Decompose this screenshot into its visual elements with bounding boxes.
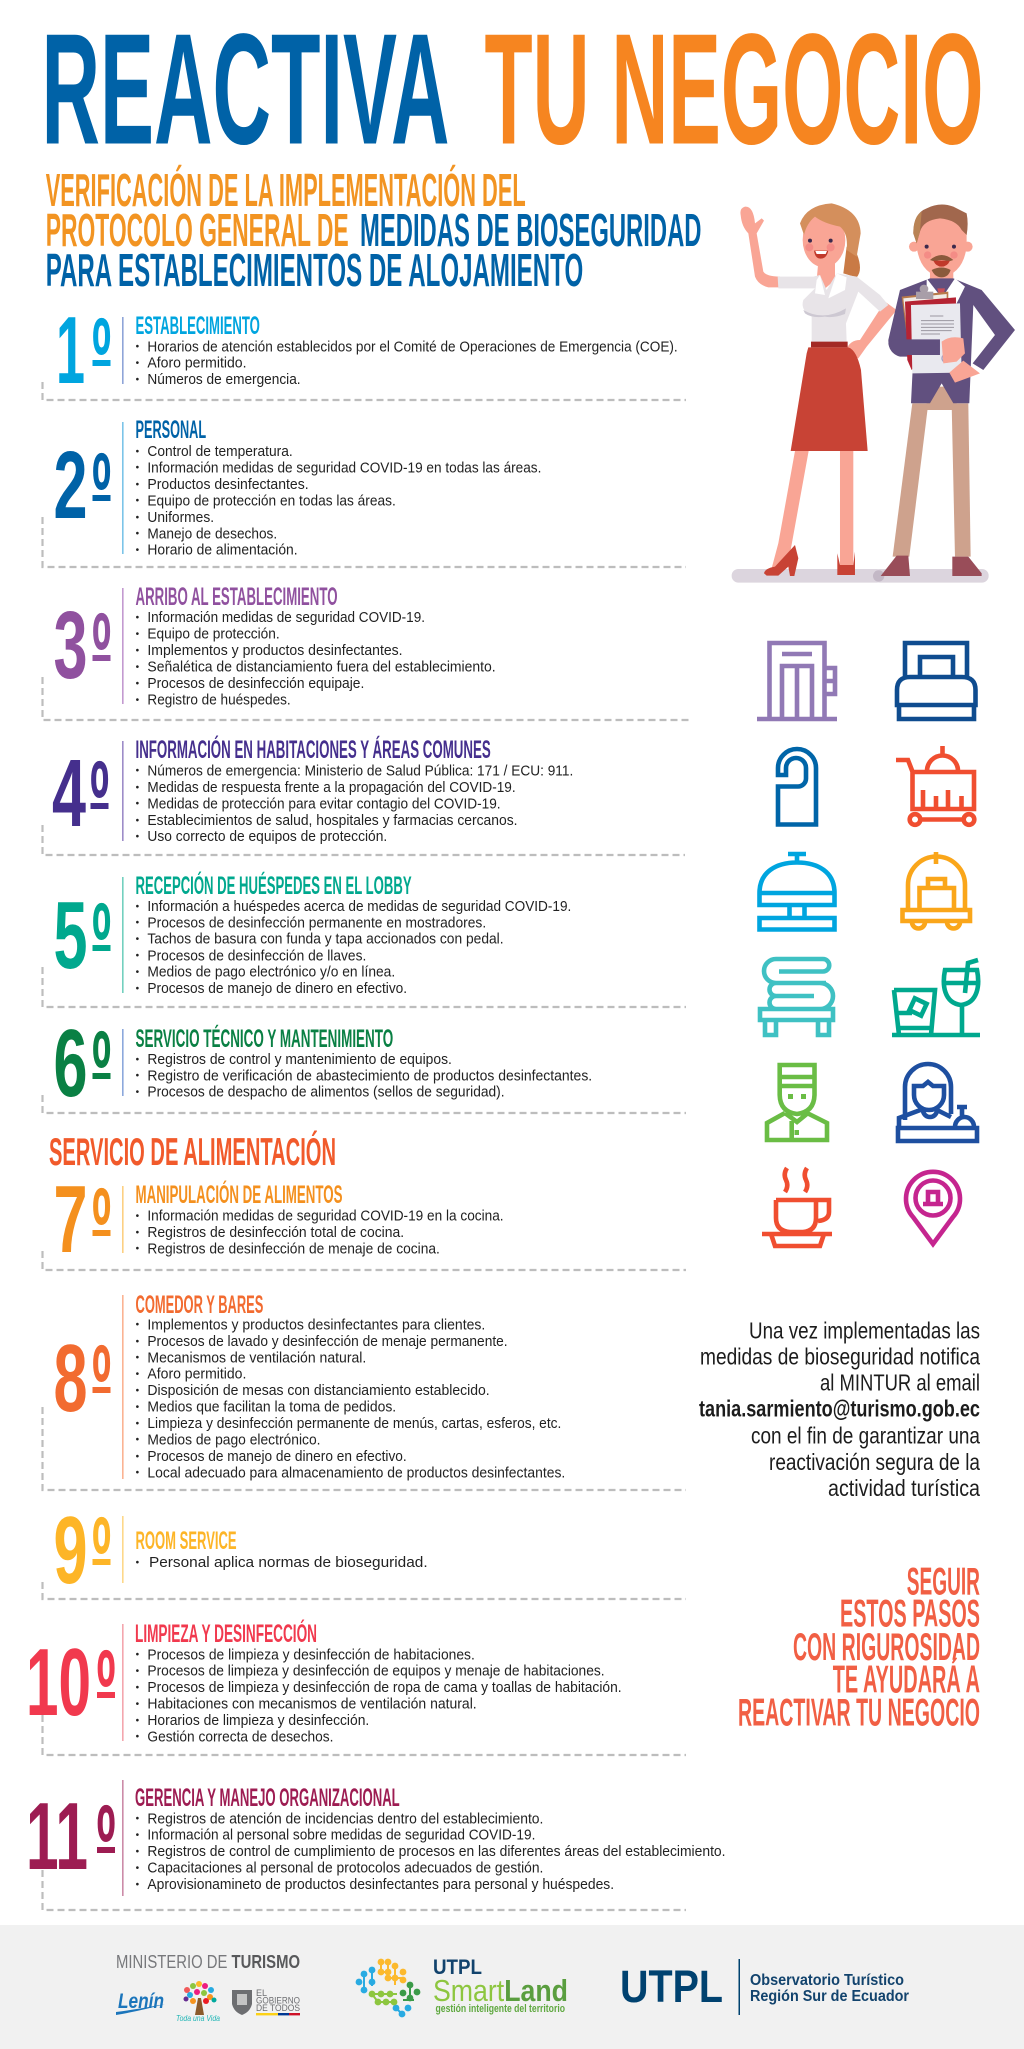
icon: drinks <box>892 960 980 1035</box>
logo: toda una vida tree <box>176 1981 220 2023</box>
step 10: º <box>96 1627 116 1750</box>
list: Medios de pago electrónico y/o en línea. <box>147 964 395 981</box>
illustration: woman and man with clipboard <box>732 203 1015 583</box>
list <box>136 1208 504 1257</box>
list: • <box>136 645 140 656</box>
number 9º: 9 <box>54 1497 88 1604</box>
subtitle <box>46 164 701 296</box>
number 7º: 7 <box>54 1166 88 1273</box>
logo: toda una vida tree: Toda una Vida <box>176 2014 220 2023</box>
list: Aprovisionamineto de productos desinfectantes para personal y huéspedes. <box>147 1876 614 1893</box>
callout: notification: al MINTUR al email <box>820 1370 980 1396</box>
list: Registros de desinfección total de cocina. <box>147 1224 404 1241</box>
list: Medios de pago electrónico. <box>147 1431 320 1448</box>
list <box>136 1810 726 1893</box>
list: • <box>136 799 140 810</box>
list: Procesos de despacho de alimentos (sellos de seguridad). <box>147 1084 505 1101</box>
logo: el gobierno de todos <box>232 1988 300 2015</box>
list: Habitaciones con mecanismos de ventilación natural. <box>147 1696 477 1713</box>
list: • <box>136 1071 140 1082</box>
callout: follow these steps <box>738 1560 980 1735</box>
list: • <box>136 512 140 523</box>
icon: coffee cup <box>762 1168 832 1246</box>
list: Establecimientos de salud, hospitales y farmacias cercanos. <box>147 812 518 829</box>
number 4º: 4 <box>52 740 86 847</box>
list: Equipo de protección. <box>147 626 280 642</box>
list: • <box>136 1557 140 1568</box>
list: • <box>136 901 140 912</box>
list: • <box>136 766 140 777</box>
list: Procesos de desinfección de llaves. <box>147 947 366 964</box>
list: Procesos de limpieza y desinfección de ropa de cama y toallas de habitación. <box>147 1679 622 1696</box>
footer <box>0 1925 1024 2049</box>
step 1: º <box>92 295 111 418</box>
list: • <box>136 1336 140 1347</box>
list: • <box>136 1468 140 1479</box>
list: Control de temperatura. <box>147 443 293 460</box>
logo: utpl smartland <box>356 1956 568 2017</box>
list: • <box>136 545 140 556</box>
list: Señalética de distanciamiento fuera del establecimiento. <box>147 658 496 676</box>
callout: notification: reactivación segura de la <box>769 1449 980 1475</box>
logo: el gobierno de todos: DE TODOS <box>256 2003 300 2013</box>
title: REACTIVA <box>42 2 450 178</box>
heading: manipulación de alimentos: MANIPULACIÓN DE ALIMENTOS <box>136 1179 342 1209</box>
logo: utpl smartland: UTPL <box>433 1956 482 1979</box>
icon: door hanger <box>778 749 816 824</box>
logo: utpl observatorio turístico: UTPL <box>620 1961 723 2012</box>
list: Implementos y productos desinfectantes. <box>147 642 403 659</box>
step 2: º <box>92 430 111 553</box>
logo: lenin: Lenín <box>118 1990 164 2013</box>
step 1 <box>42 295 686 418</box>
list: • <box>136 1054 140 1065</box>
list: Aforo permitido. <box>147 1366 246 1383</box>
list: • <box>136 967 140 978</box>
list: • <box>136 815 140 826</box>
list: • <box>136 1732 140 1743</box>
list: • <box>136 1320 140 1331</box>
list <box>136 1646 622 1745</box>
step 2 <box>42 416 686 567</box>
list: • <box>136 1227 140 1238</box>
number 2º: 2 <box>54 432 88 539</box>
list: • <box>136 496 140 507</box>
list: • <box>136 1830 140 1841</box>
number 5º: 5 <box>54 882 88 989</box>
number 1º: 1 <box>56 297 85 404</box>
step 11: º <box>96 1782 116 1905</box>
list: Medidas de protección para evitar contagio del COVID-19. <box>147 795 501 812</box>
list: • <box>136 1353 140 1364</box>
step 3 <box>42 583 692 720</box>
list: Procesos de lavado y desinfección de menaje permanente. <box>147 1333 508 1350</box>
number 6º: 6 <box>54 1010 88 1117</box>
list: Implementos y productos desinfectantes para clientes. <box>147 1316 485 1333</box>
list: • <box>136 1402 140 1413</box>
list: Productos desinfectantes. <box>147 476 309 493</box>
list: Registros de control de cumplimiento de procesos en las diferentes áreas del establecimiento. <box>147 1843 725 1860</box>
list <box>136 1051 592 1101</box>
list: • <box>136 1666 140 1677</box>
icon: bed <box>897 643 976 719</box>
icon: food cart <box>896 746 974 825</box>
icon: reception bell <box>760 854 834 930</box>
step 8 <box>42 1291 686 1490</box>
step 7 <box>42 1165 686 1288</box>
step 9: º <box>92 1494 111 1617</box>
list: Uniformes. <box>147 509 214 526</box>
list: Información al personal sobre medidas de seguridad COVID-19. <box>147 1827 535 1844</box>
step 7: º <box>92 1165 111 1288</box>
list: • <box>136 695 140 706</box>
list: • <box>136 463 140 474</box>
list <box>136 898 571 997</box>
step 5 <box>42 870 686 1007</box>
list: Procesos de limpieza y desinfección de equipos y menaje de habitaciones. <box>147 1663 605 1680</box>
list: • <box>136 612 140 623</box>
list: Local adecuado para almacenamiento de productos desinfectantes. <box>147 1464 565 1481</box>
list: Registros de atención de incidencias dentro del establecimiento. <box>147 1810 543 1827</box>
list: • <box>136 1699 140 1710</box>
list: Equipo de protección en todas las áreas. <box>147 492 396 509</box>
list: Procesos de limpieza y desinfección de habitaciones. <box>147 1646 475 1663</box>
list <box>136 1316 565 1481</box>
icon: bellboy <box>767 1065 827 1140</box>
list: Horarios de limpieza y desinfección. <box>147 1712 369 1729</box>
list: Información medidas de seguridad COVID-19 en la cocina. <box>147 1208 504 1225</box>
callout: notification: Una vez implementadas las <box>749 1317 980 1343</box>
subtitle: MEDIDAS DE BIOSEGURIDAD <box>360 204 702 256</box>
number 10º: 10 <box>26 1629 91 1736</box>
list: • <box>136 342 140 353</box>
list: Registros de control y mantenimiento de equipos. <box>147 1051 452 1068</box>
list: Registro de huéspedes. <box>147 692 291 708</box>
list: • <box>136 983 140 994</box>
list: Números de emergencia. <box>147 371 301 388</box>
step 8: º <box>92 1322 111 1445</box>
logo: el gobierno de todos: GOBIERNO <box>256 1996 300 2006</box>
list: Tachos de basura con funda y tapa accionados con pedal. <box>147 931 504 948</box>
heading: establecimiento: ESTABLECIMIENTO <box>136 312 260 340</box>
list: Limpieza y desinfección permanente de menús, cartas, esferos, etc. <box>147 1415 561 1432</box>
list: Procesos de desinfección equipaje. <box>147 675 364 692</box>
callout: notification: con el fin de garantizar una <box>751 1422 980 1448</box>
list: • <box>136 1211 140 1222</box>
list: • <box>136 1451 140 1462</box>
icon: location pin <box>906 1172 960 1244</box>
list: • <box>136 1369 140 1380</box>
heading: información en habitaciones: INFORMACIÓN EN HABITACIONES Y ÁREAS COMUNES <box>136 734 491 764</box>
heading: recepción de huéspedes: RECEPCIÓN DE HUÉSPEDES EN EL LOBBY <box>136 870 412 900</box>
logo: utpl smartland: SmartLand <box>433 1973 568 2008</box>
list: • <box>136 918 140 929</box>
list: • <box>136 1650 140 1661</box>
list <box>136 443 541 559</box>
list: Disposición de mesas con distanciamiento establecido. <box>147 1382 490 1399</box>
icon: receptionist <box>898 1064 977 1141</box>
list: Uso correcto de equipos de protección. <box>147 828 387 845</box>
list: • <box>136 629 140 640</box>
list: Registros de desinfección de menaje de cocina. <box>147 1240 440 1257</box>
logo: el gobierno de todos: EL <box>256 1988 267 1998</box>
list: • <box>136 1715 140 1726</box>
list: Procesos de manejo de dinero en efectivo. <box>147 980 407 997</box>
list: • <box>136 934 140 945</box>
step 5: º <box>92 880 111 1003</box>
list: Procesos de manejo de dinero en efectivo. <box>147 1448 407 1465</box>
list: • <box>136 1682 140 1693</box>
step 4: º <box>90 738 109 861</box>
list: Procesos de desinfección permanente en mostradores. <box>147 914 486 931</box>
list: • <box>136 1814 140 1825</box>
list: Manejo de desechos. <box>147 525 277 542</box>
heading: personal: PERSONAL <box>136 416 206 444</box>
list: Horarios de atención establecidos por el Comité de Operaciones de Emergencia (COE). <box>147 338 678 355</box>
list: • <box>136 1244 140 1255</box>
step 6: º <box>92 1008 111 1131</box>
list: • <box>136 374 140 385</box>
list: Capacitaciones al personal de protocolos adecuados de gestión. <box>147 1860 543 1877</box>
list: • <box>136 479 140 490</box>
callout: notification: actividad turística <box>828 1475 980 1501</box>
list: Medios que facilitan la toma de pedidos. <box>147 1399 396 1416</box>
number 3º: 3 <box>54 592 88 699</box>
list: • <box>136 1846 140 1857</box>
step 6 <box>42 1008 686 1131</box>
section heading: servicio de alimentación: SERVICIO DE ALIMENTACIÓN <box>49 1130 336 1174</box>
list <box>136 762 573 845</box>
logo: utpl observatorio turístico: Observatorio Turístico <box>750 1972 904 1989</box>
icon: towels on bench <box>760 959 833 1035</box>
step 3: º <box>92 590 111 713</box>
list: • <box>136 1435 140 1446</box>
heading: room service: ROOM SERVICE <box>136 1527 237 1555</box>
logo: ministerio de turismo: MINISTERIO DE TURISMO <box>116 1952 300 1972</box>
list <box>136 338 678 388</box>
list: Mecanismos de ventilación natural. <box>147 1349 366 1366</box>
list: • <box>136 1418 140 1429</box>
list: Registro de verificación de abastecimiento de productos desinfectantes. <box>147 1067 592 1084</box>
list <box>136 609 496 708</box>
logo: utpl observatorio turístico <box>620 1959 909 2015</box>
list: Información medidas de seguridad COVID-19. <box>147 609 425 626</box>
heading: comedor y bares: COMEDOR Y BARES <box>136 1291 263 1319</box>
list: • <box>136 529 140 540</box>
list: • <box>136 951 140 962</box>
number 8º: 8 <box>54 1325 88 1432</box>
icon: luggage cart <box>902 852 970 929</box>
list: Información a huéspedes acerca de medidas de seguridad COVID-19. <box>147 898 571 915</box>
heading: arribo al establecimiento: ARRIBO AL ESTABLECIMIENTO <box>136 583 338 611</box>
step 4 <box>42 734 685 861</box>
list: • <box>136 446 140 457</box>
list: • <box>136 1863 140 1874</box>
list: Gestión correcta de desechos. <box>147 1728 334 1745</box>
logo: utpl smartland: gestión inteligente del territorio <box>436 2003 565 2015</box>
heading: gerencia y manejo organizacional: GERENCIA Y MANEJO ORGANIZACIONAL <box>135 1784 400 1812</box>
step 9 <box>42 1494 686 1617</box>
list: • <box>136 1087 140 1098</box>
callout: notification <box>699 1317 980 1501</box>
number 11º: 11 <box>26 1783 88 1890</box>
list: Medidas de respuesta frente a la propagación del COVID-19. <box>147 779 516 796</box>
list: • <box>136 358 140 369</box>
step 10 <box>26 1618 686 1755</box>
logo: utpl observatorio turístico: Región Sur de Ecuador <box>750 1988 909 2005</box>
list: • <box>136 1879 140 1890</box>
heading: limpieza y desinfección: LIMPIEZA Y DESINFECCIÓN <box>135 1618 317 1648</box>
list: Personal aplica normas de bioseguridad. <box>149 1554 428 1571</box>
icon: elevator <box>757 643 837 719</box>
list: • <box>136 831 140 842</box>
list: • <box>136 678 140 689</box>
list: Información medidas de seguridad COVID-19 en todas las áreas. <box>147 459 541 476</box>
step 11 <box>26 1780 726 1910</box>
list: • <box>136 662 140 673</box>
list: Aforo permitido. <box>147 355 246 372</box>
list: • <box>136 1385 140 1396</box>
subtitle: PROTOCOLO GENERAL DE <box>46 204 349 256</box>
list: Números de emergencia: Ministerio de Salud Pública: 171 / ECU: 911. <box>147 762 573 779</box>
list: • <box>136 782 140 793</box>
heading: servicio técnico: SERVICIO TÉCNICO Y MANTENIMIENTO <box>136 1024 393 1053</box>
list: Horario de alimentación. <box>147 542 298 559</box>
